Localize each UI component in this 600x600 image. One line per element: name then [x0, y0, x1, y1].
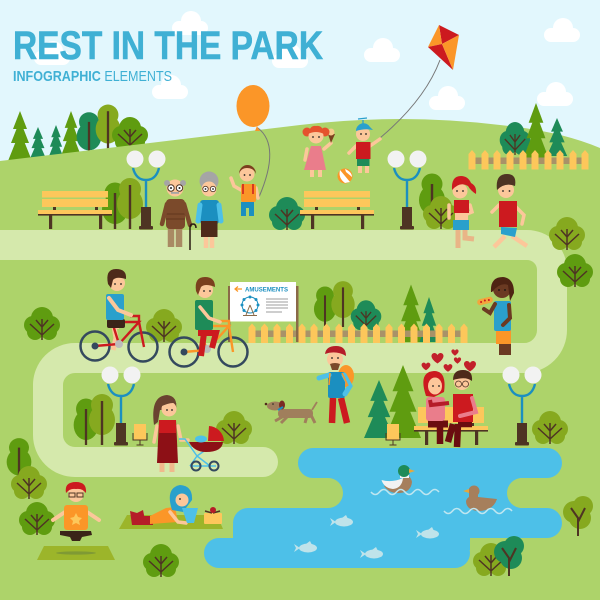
back left tree line	[8, 105, 148, 161]
mid-field trees and fence	[24, 281, 468, 343]
clouds	[34, 11, 580, 110]
subtitle: INFOGRAPHIC ELEMENTS	[13, 68, 172, 85]
woman with stroller	[153, 395, 224, 472]
benches	[38, 191, 374, 229]
boy with balloon	[231, 165, 258, 216]
jogging man	[492, 174, 527, 247]
fish	[294, 515, 439, 558]
boy flying kite	[349, 118, 380, 173]
jogging woman	[449, 176, 476, 248]
lamp posts	[102, 150, 542, 446]
woman reading on mat	[119, 485, 223, 529]
meditating man on mat	[37, 482, 115, 560]
elderly man with cane	[162, 180, 196, 250]
person eating pizza	[477, 277, 514, 355]
amusements sign: AMUSEMENTS	[245, 286, 289, 294]
trees along the top of the path	[102, 174, 593, 287]
girl with ice cream	[302, 126, 335, 177]
upper fence with trees	[468, 103, 588, 170]
couple on bench with hearts	[414, 349, 488, 447]
amusements sign	[228, 282, 298, 342]
brown duck	[444, 486, 512, 514]
balloon	[236, 85, 270, 197]
lake	[204, 448, 600, 568]
beach ball	[338, 168, 352, 184]
kite	[380, 25, 459, 138]
lower trees and lantern	[7, 365, 593, 577]
mallard duck	[371, 465, 439, 494]
cyclist with red bike	[80, 269, 158, 362]
cyclist with orange bike	[170, 277, 248, 366]
dachshund dog	[265, 400, 317, 423]
hiker with backpack	[319, 346, 354, 423]
title: REST IN THE PARK	[13, 24, 323, 68]
winding footpath	[0, 245, 552, 462]
elderly woman	[198, 172, 221, 248]
